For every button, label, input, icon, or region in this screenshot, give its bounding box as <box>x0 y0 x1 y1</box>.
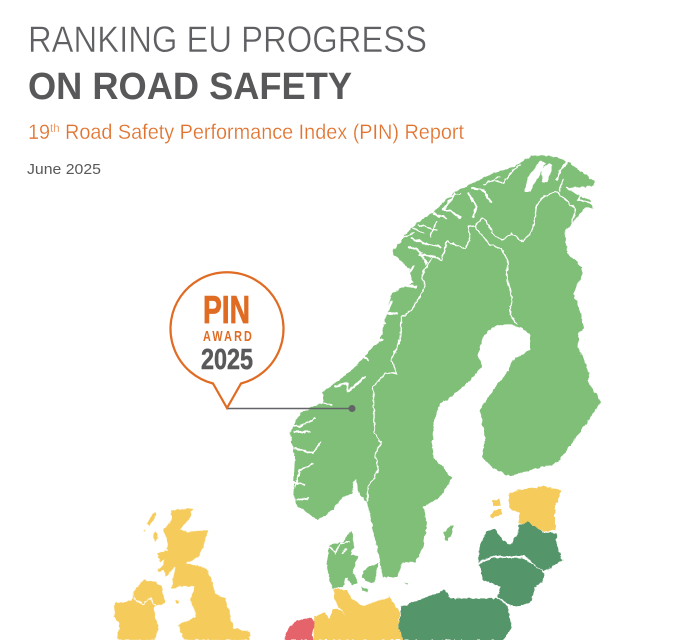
border: Norway and Sweden <box>367 226 475 502</box>
PIN text: PIN <box>203 289 250 332</box>
date: June 2025 <box>27 161 101 178</box>
Netherlands <box>284 618 315 640</box>
Denmark <box>327 531 408 592</box>
Scottish islands <box>143 512 179 604</box>
subtitle: Road Safety Performance Index (PIN) Report <box>60 121 464 144</box>
Estonia <box>490 486 562 532</box>
speech bubble <box>171 272 284 408</box>
Latvia <box>479 522 562 572</box>
Ireland <box>113 580 165 640</box>
AWARD text: AWARD <box>203 328 254 345</box>
map of northern Europe <box>113 155 601 640</box>
Germany <box>313 589 403 640</box>
Jutland inlet <box>330 542 350 553</box>
Northern Ireland border <box>133 597 155 606</box>
leader line <box>227 408 352 410</box>
Poland <box>398 590 512 640</box>
year text: 2025 <box>201 344 253 376</box>
PIN award callout <box>171 272 356 412</box>
land mass <box>290 155 601 577</box>
subtitle: th <box>50 121 60 135</box>
Great Britain <box>163 508 250 640</box>
UK and Ireland <box>113 508 250 640</box>
title line 1: RANKING EU PROGRESS <box>28 18 427 60</box>
Gotland <box>444 525 453 541</box>
Nordic countries: Norway, Sweden, Finland <box>290 155 601 577</box>
national borders <box>367 178 575 502</box>
title line 2: ON ROAD SAFETY <box>28 66 352 108</box>
leader dot <box>348 405 356 412</box>
border: Norway and Finland <box>475 178 575 242</box>
Baltics, Germany, Poland, Denmark and Netherlands <box>284 486 562 640</box>
Lithuania <box>479 558 543 607</box>
border: Sweden and Finland <box>475 226 517 325</box>
subtitle: 19 <box>28 121 51 144</box>
fjords and coastal inlets <box>335 162 592 392</box>
